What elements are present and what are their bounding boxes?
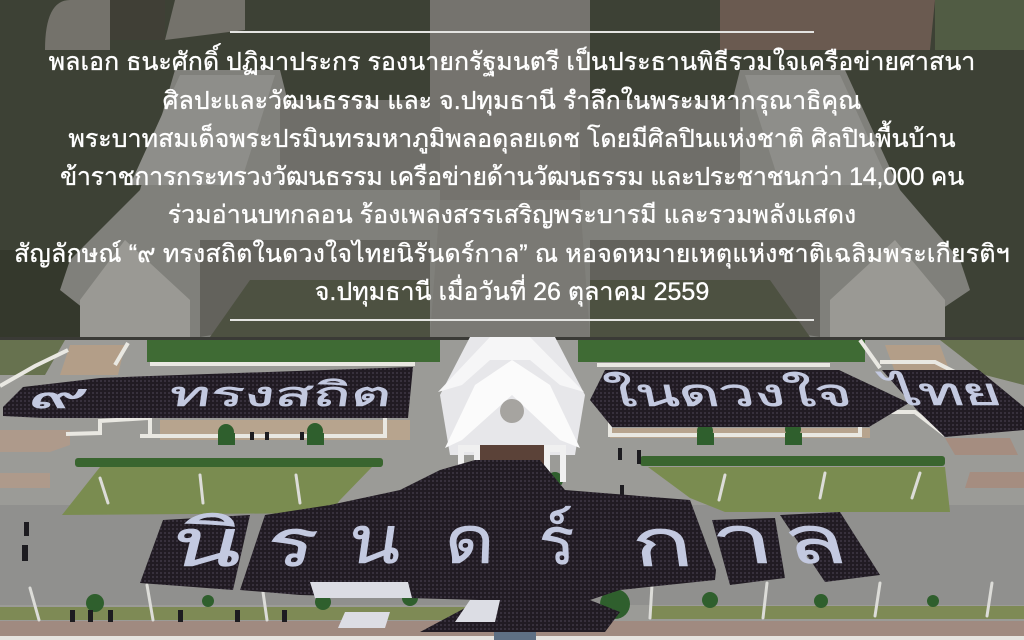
crowd formations xyxy=(3,367,1024,632)
bottom rule xyxy=(230,319,814,321)
crowd lettering: lower row: า xyxy=(705,504,780,578)
crowd lettering: lower row: ร์ xyxy=(537,504,577,578)
crowd lettering: lower row: ร xyxy=(259,508,324,581)
caption line 7: จ.ปทุมธานี เมื่อวันที่ 26 ตุลาคม 2559 xyxy=(315,278,709,306)
crowd lettering: lower row: ล xyxy=(774,504,854,578)
caption line 3: พระบาทสมเด็จพระปรมินทรมหาภูมิพลอดุลยเดช โดยมีศิลปินแห่งชาติ ศิลปินพื้นบ้าน xyxy=(68,125,956,153)
crowd lettering: upper right: ในดวงใจ xyxy=(601,371,856,415)
crowd lettering: upper left xyxy=(23,376,394,416)
crowd lettering: lower row xyxy=(161,503,854,581)
central white pavilion xyxy=(438,337,585,640)
crowd lettering: upper left: ทรงสถิต xyxy=(167,376,394,414)
crowd lettering: lower row: นิ xyxy=(161,507,254,581)
white balustrades xyxy=(0,340,1024,438)
hedges and lawns xyxy=(0,340,1024,640)
top rule xyxy=(230,31,814,33)
caption line 5: ร่วมอ่านบทกลอน ร้องเพลงสรรเสริญพระบารมี และรวมพลังแสดง xyxy=(168,201,856,229)
caption line 2: ศิลปะและวัฒนธรรม และ จ.ปทุมธานี รำลึกในพระมหากรุณาธิคุณ xyxy=(163,87,861,115)
people on the plaza xyxy=(22,432,641,622)
caption line 6: สัญลักษณ์ “๙ ทรงสถิตในดวงใจไทยนิรันดร์กาล” ณ หอจดหมายเหตุแห่งชาติเฉลิมพระเกียรติฯ xyxy=(14,240,1010,268)
crowd lettering: lower row: ด xyxy=(444,503,496,577)
caption line 4: ข้าราชการกระทรวงวัฒนธรรม เครือข่ายด้านวัฒนธรรม และประชาชนกว่า 14,000 คน xyxy=(60,163,964,191)
crowd lettering: lower row: ก xyxy=(627,507,697,581)
crowd lettering: upper left: ๙ xyxy=(23,378,94,416)
caption line 1: พลเอก ธนะศักดิ์ ปฏิมาประกร รองนายกรัฐมนตรี เป็นประธานพิธีรวมใจเครือข่ายศาสนา xyxy=(49,48,975,76)
caption block xyxy=(14,31,1010,321)
upper photo: dimmed building and trees xyxy=(0,0,1024,337)
crowd lettering: lower row: น xyxy=(343,504,407,578)
lamp posts xyxy=(30,473,992,620)
crowd lettering: upper right: ไทย xyxy=(874,370,1007,414)
white-robed group at the front of the crowd xyxy=(310,582,500,628)
bushes and small trees xyxy=(86,421,939,619)
crowd lettering: upper right xyxy=(601,370,1007,415)
lower photo: ground and paving xyxy=(0,337,1024,640)
